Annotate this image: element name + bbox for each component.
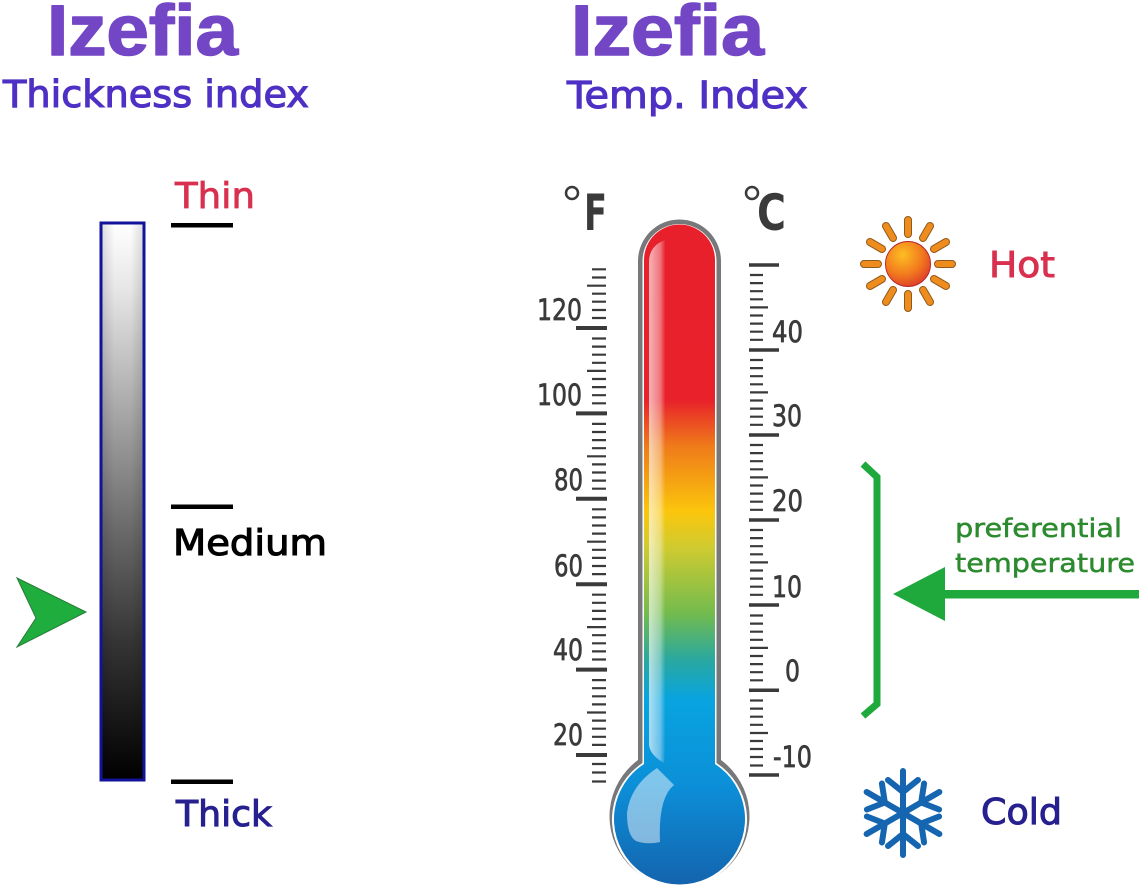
Celsius scale numbers: 0	[785, 654, 800, 688]
panel: thermometer	[537, 184, 812, 887]
unit: Celsius: C	[757, 184, 786, 242]
marker: thin	[171, 223, 233, 228]
Celsius scale numbers: 10	[772, 570, 802, 604]
Celsius scale numbers	[772, 315, 812, 774]
thermometer body	[610, 219, 750, 887]
Celsius scale numbers: 20	[772, 484, 803, 518]
Fahrenheit scale numbers: 120	[537, 293, 582, 327]
subtitle: Thickness index: Thickness index	[2, 73, 309, 116]
Fahrenheit scale numbers: 60	[554, 549, 583, 583]
icon: snowflake	[859, 771, 947, 855]
callout: preferential temperature: temperature	[955, 549, 1135, 579]
Fahrenheit scale numbers: 40	[553, 633, 583, 667]
label: Thin: Thin	[174, 176, 255, 217]
bracket: preferential range	[863, 464, 877, 716]
Fahrenheit scale numbers: 20	[553, 718, 583, 752]
arrow: thickness indicator	[17, 578, 86, 647]
bulb highlight	[627, 768, 674, 843]
subtitle: Temp. Index: Temp. Index	[566, 74, 808, 117]
Fahrenheit scale numbers	[537, 293, 583, 752]
label: Medium: Medium	[173, 523, 327, 564]
unit: Fahrenheit: F	[584, 184, 607, 242]
Celsius scale numbers: 40	[772, 315, 803, 349]
Fahrenheit scale numbers: 100	[537, 378, 582, 412]
Celsius scale numbers: -10	[773, 740, 812, 774]
unit: Fahrenheit	[566, 184, 607, 242]
tube highlight	[649, 240, 665, 763]
Celsius scale numbers: 30	[772, 399, 802, 433]
Fahrenheit scale ticks	[576, 269, 607, 782]
label: Cold: Cold	[981, 792, 1062, 833]
unit: Celsius	[746, 184, 786, 242]
icon: sun	[864, 220, 952, 308]
callout: preferential temperature	[955, 514, 1135, 579]
label: Hot: Hot	[989, 245, 1055, 286]
marker: thick	[171, 780, 233, 784]
callout: preferential temperature: preferential	[955, 514, 1122, 544]
gradient bar	[101, 223, 144, 780]
Fahrenheit scale numbers: 80	[554, 463, 583, 497]
arrow: preferential temperature	[893, 567, 1139, 621]
panel: thickness scale	[17, 176, 327, 835]
marker: medium	[171, 504, 233, 509]
Celsius scale ticks	[749, 265, 779, 775]
label: Thick: Thick	[175, 794, 272, 835]
